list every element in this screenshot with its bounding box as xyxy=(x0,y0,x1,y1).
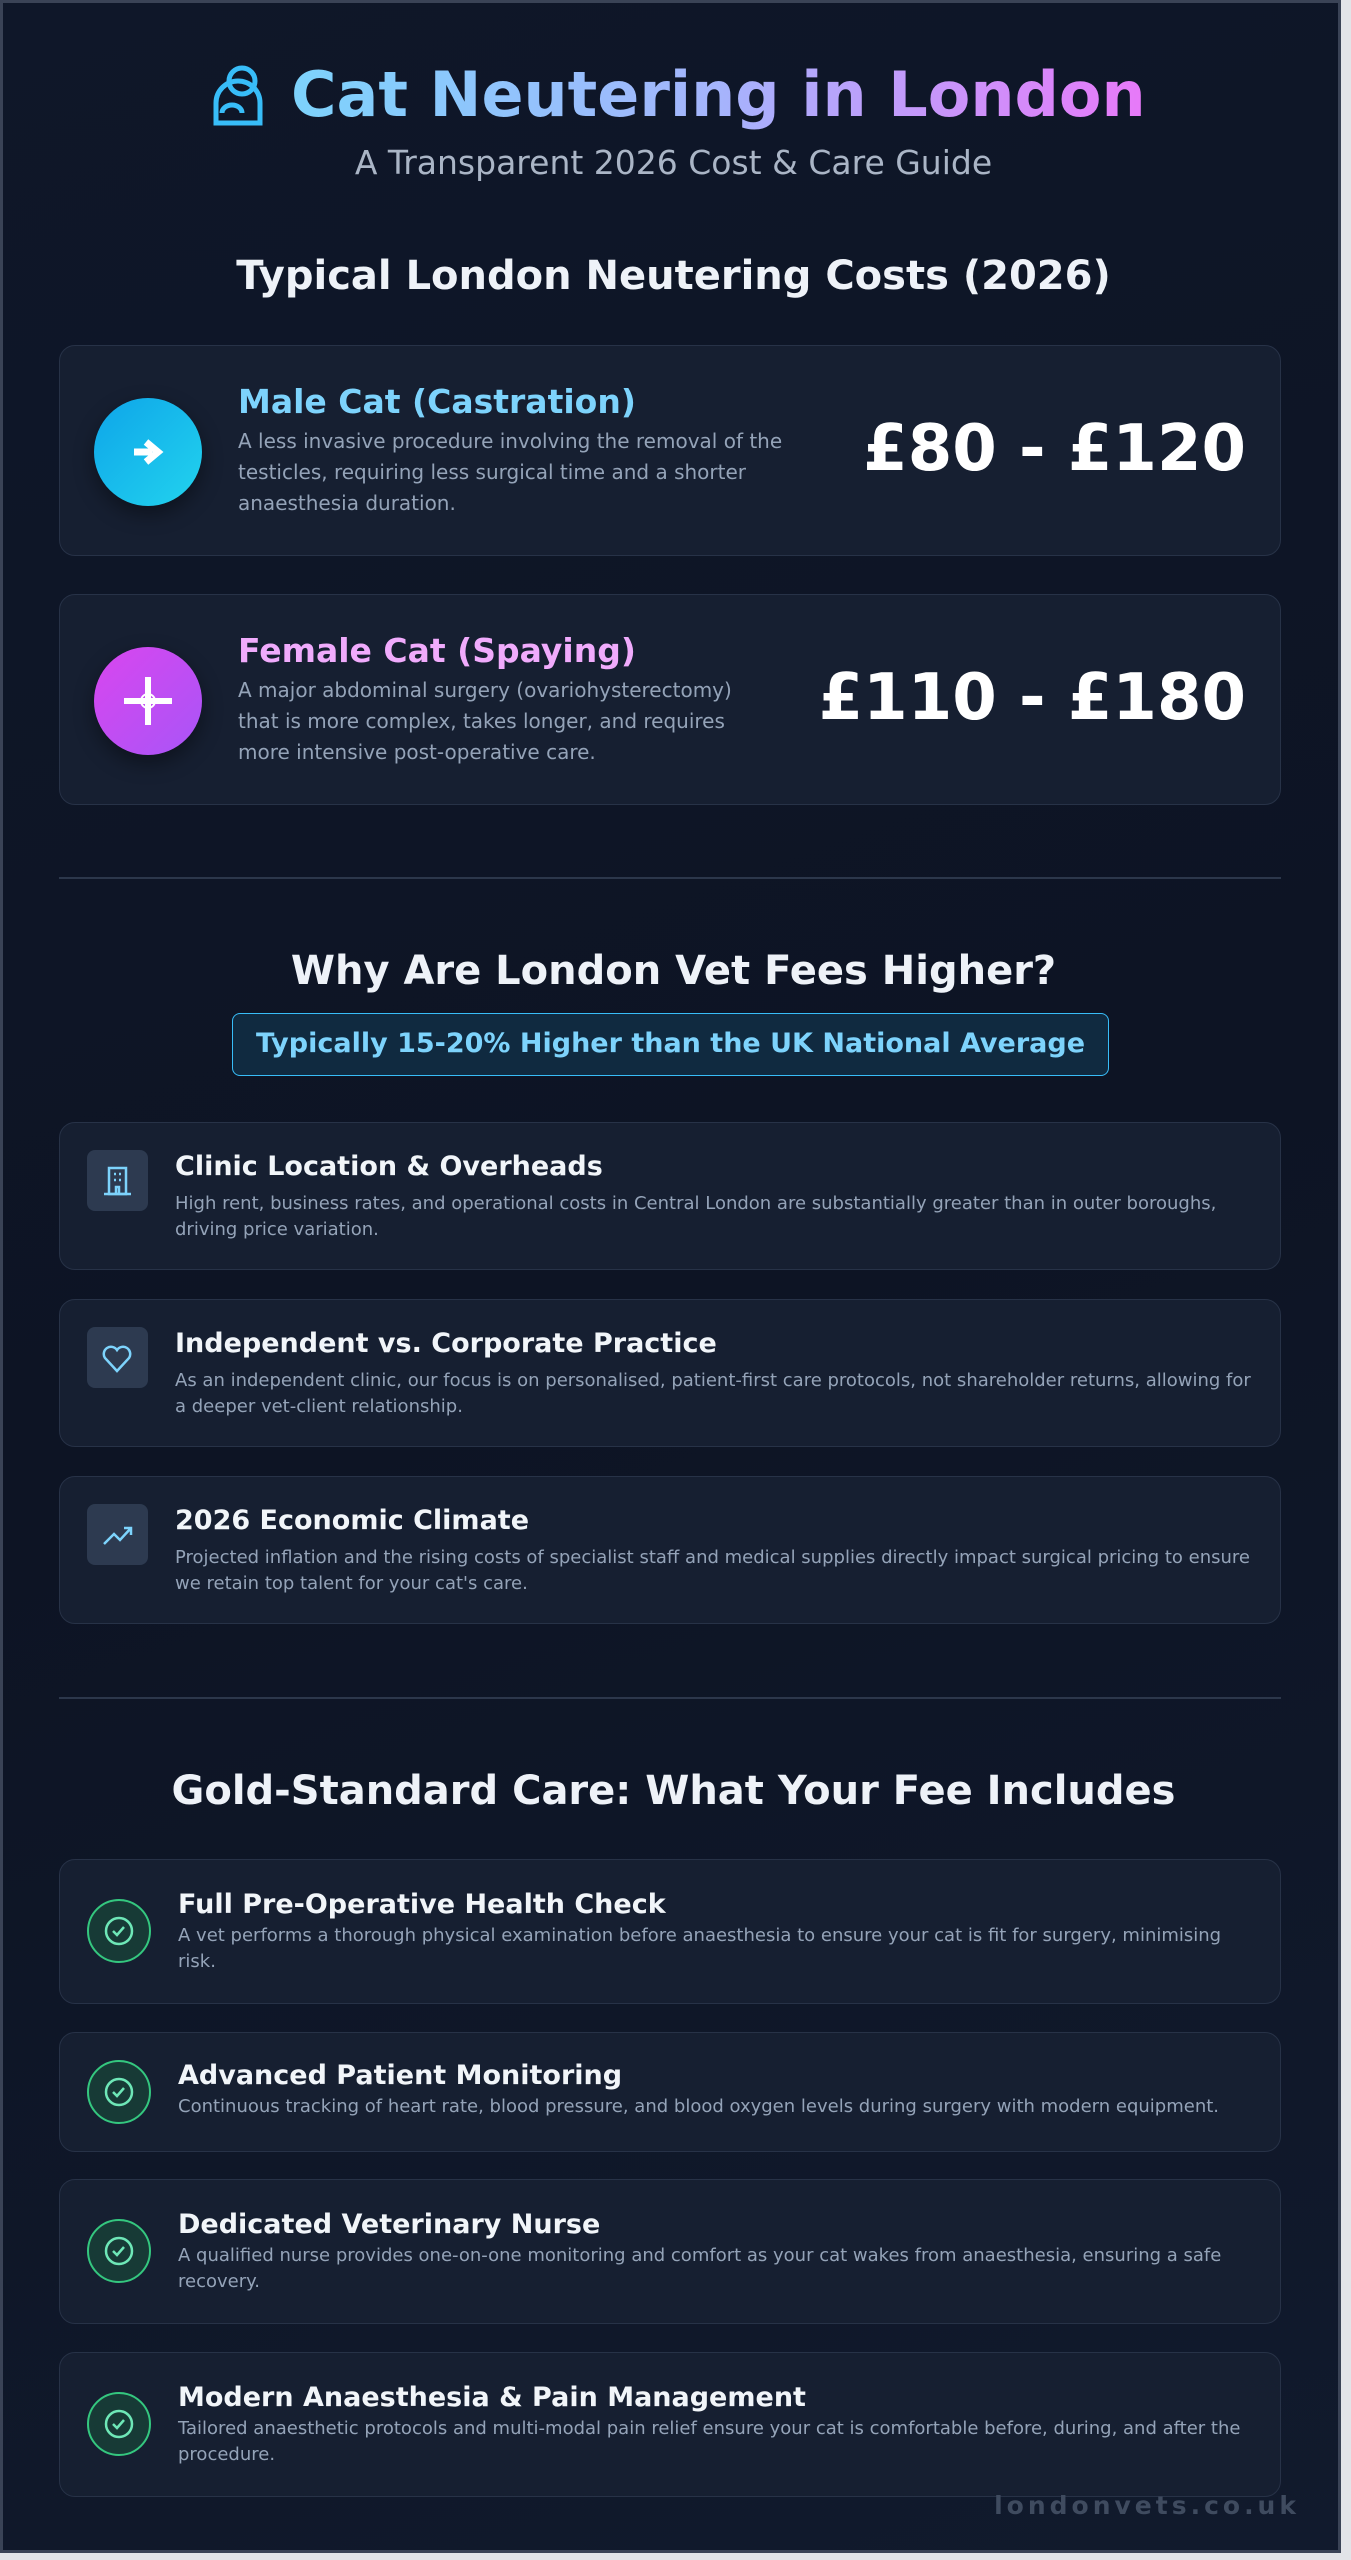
panel: health check xyxy=(59,1859,1281,2004)
panel: independent: As an independent clinic, our focus is on personalised, patient-first care protocols, not shareholder returns, allowing for a deeper vet-client relationship. xyxy=(175,1370,1251,1417)
panel: health check: Full Pre-Operative Health Check xyxy=(178,1889,666,1920)
icon: check xyxy=(87,1899,151,1963)
icon: building xyxy=(87,1150,148,1211)
icon: check xyxy=(87,2219,151,2283)
subtitle: A Transparent 2026 Cost & Care Guide xyxy=(355,143,992,182)
icon: check xyxy=(87,2060,151,2124)
panel: location xyxy=(59,1122,1281,1270)
heading: costs: Typical London Neutering Costs (2026) xyxy=(236,253,1111,299)
panel: monitoring: Continuous tracking of heart rate, blood pressure, and blood oxygen levels during surgery with modern equipment. xyxy=(178,2096,1219,2117)
badge xyxy=(232,1013,1109,1076)
panel: female cat xyxy=(59,594,1281,805)
panel: female cat: A major abdominal surgery (ovariohysterectomy) that is more complex, takes longer, and requires more intensive post-operative care. xyxy=(238,678,732,764)
icon: male xyxy=(94,398,202,506)
panel: economy: 2026 Economic Climate xyxy=(175,1505,529,1536)
price: £80 - £120 xyxy=(863,412,1246,486)
icon: check xyxy=(87,2392,151,2456)
panel: economy xyxy=(59,1476,1281,1624)
price: £110 - £180 xyxy=(819,661,1246,735)
icon: heart xyxy=(87,1327,148,1388)
icon: female xyxy=(94,647,202,755)
panel: nurse xyxy=(59,2179,1281,2324)
heading: gold standard: Gold-Standard Care: What Your Fee Includes xyxy=(172,1768,1175,1814)
panel: location: Clinic Location & Overheads xyxy=(175,1151,603,1182)
title: Cat Neutering in London xyxy=(291,58,1146,131)
badge: Typically 15-20% Higher than the UK National Average xyxy=(256,1028,1085,1059)
icon: trend xyxy=(87,1504,148,1565)
panel: nurse: A qualified nurse provides one-on-one monitoring and comfort as your cat wakes from anaesthesia, ensuring a safe recovery. xyxy=(178,2245,1221,2292)
panel: health check: A vet performs a thorough physical examination before anaesthesia to ensure your cat is fit for surgery, minimising risk. xyxy=(178,1925,1221,1972)
text: Male Cat (Castration) xyxy=(238,382,636,421)
panel: monitoring xyxy=(59,2032,1281,2152)
panel: independent xyxy=(59,1299,1281,1447)
heading: why: Why Are London Vet Fees Higher? xyxy=(291,948,1056,994)
panel: independent: Independent vs. Corporate Practice xyxy=(175,1328,717,1359)
panel: monitoring: Advanced Patient Monitoring xyxy=(178,2060,622,2091)
icon: cat xyxy=(214,66,262,126)
panel: anaesthesia xyxy=(59,2352,1281,2497)
panel: location: High rent, business rates, and operational costs in Central London are substantially greater than in outer boroughs, driving price variation. xyxy=(175,1193,1216,1240)
panel: anaesthesia: Tailored anaesthetic protocols and multi-modal pain relief ensure your cat is comfortable before, during, and after the procedure. xyxy=(178,2418,1240,2465)
footer: website: londonvets.co.uk xyxy=(994,2491,1300,2520)
panel: male cat xyxy=(59,345,1281,556)
panel: male cat: A less invasive procedure involving the removal of the testicles, requiring less surgical time and a shorter anaesthesia duration. xyxy=(238,429,782,515)
panel: economy: Projected inflation and the rising costs of specialist staff and medical supplies directly impact surgical pricing to ensure we retain top talent for your cat's care. xyxy=(175,1547,1250,1594)
panel: anaesthesia: Modern Anaesthesia & Pain Management xyxy=(178,2382,806,2413)
panel: nurse: Dedicated Veterinary Nurse xyxy=(178,2209,600,2240)
text: Female Cat (Spaying) xyxy=(238,631,636,670)
